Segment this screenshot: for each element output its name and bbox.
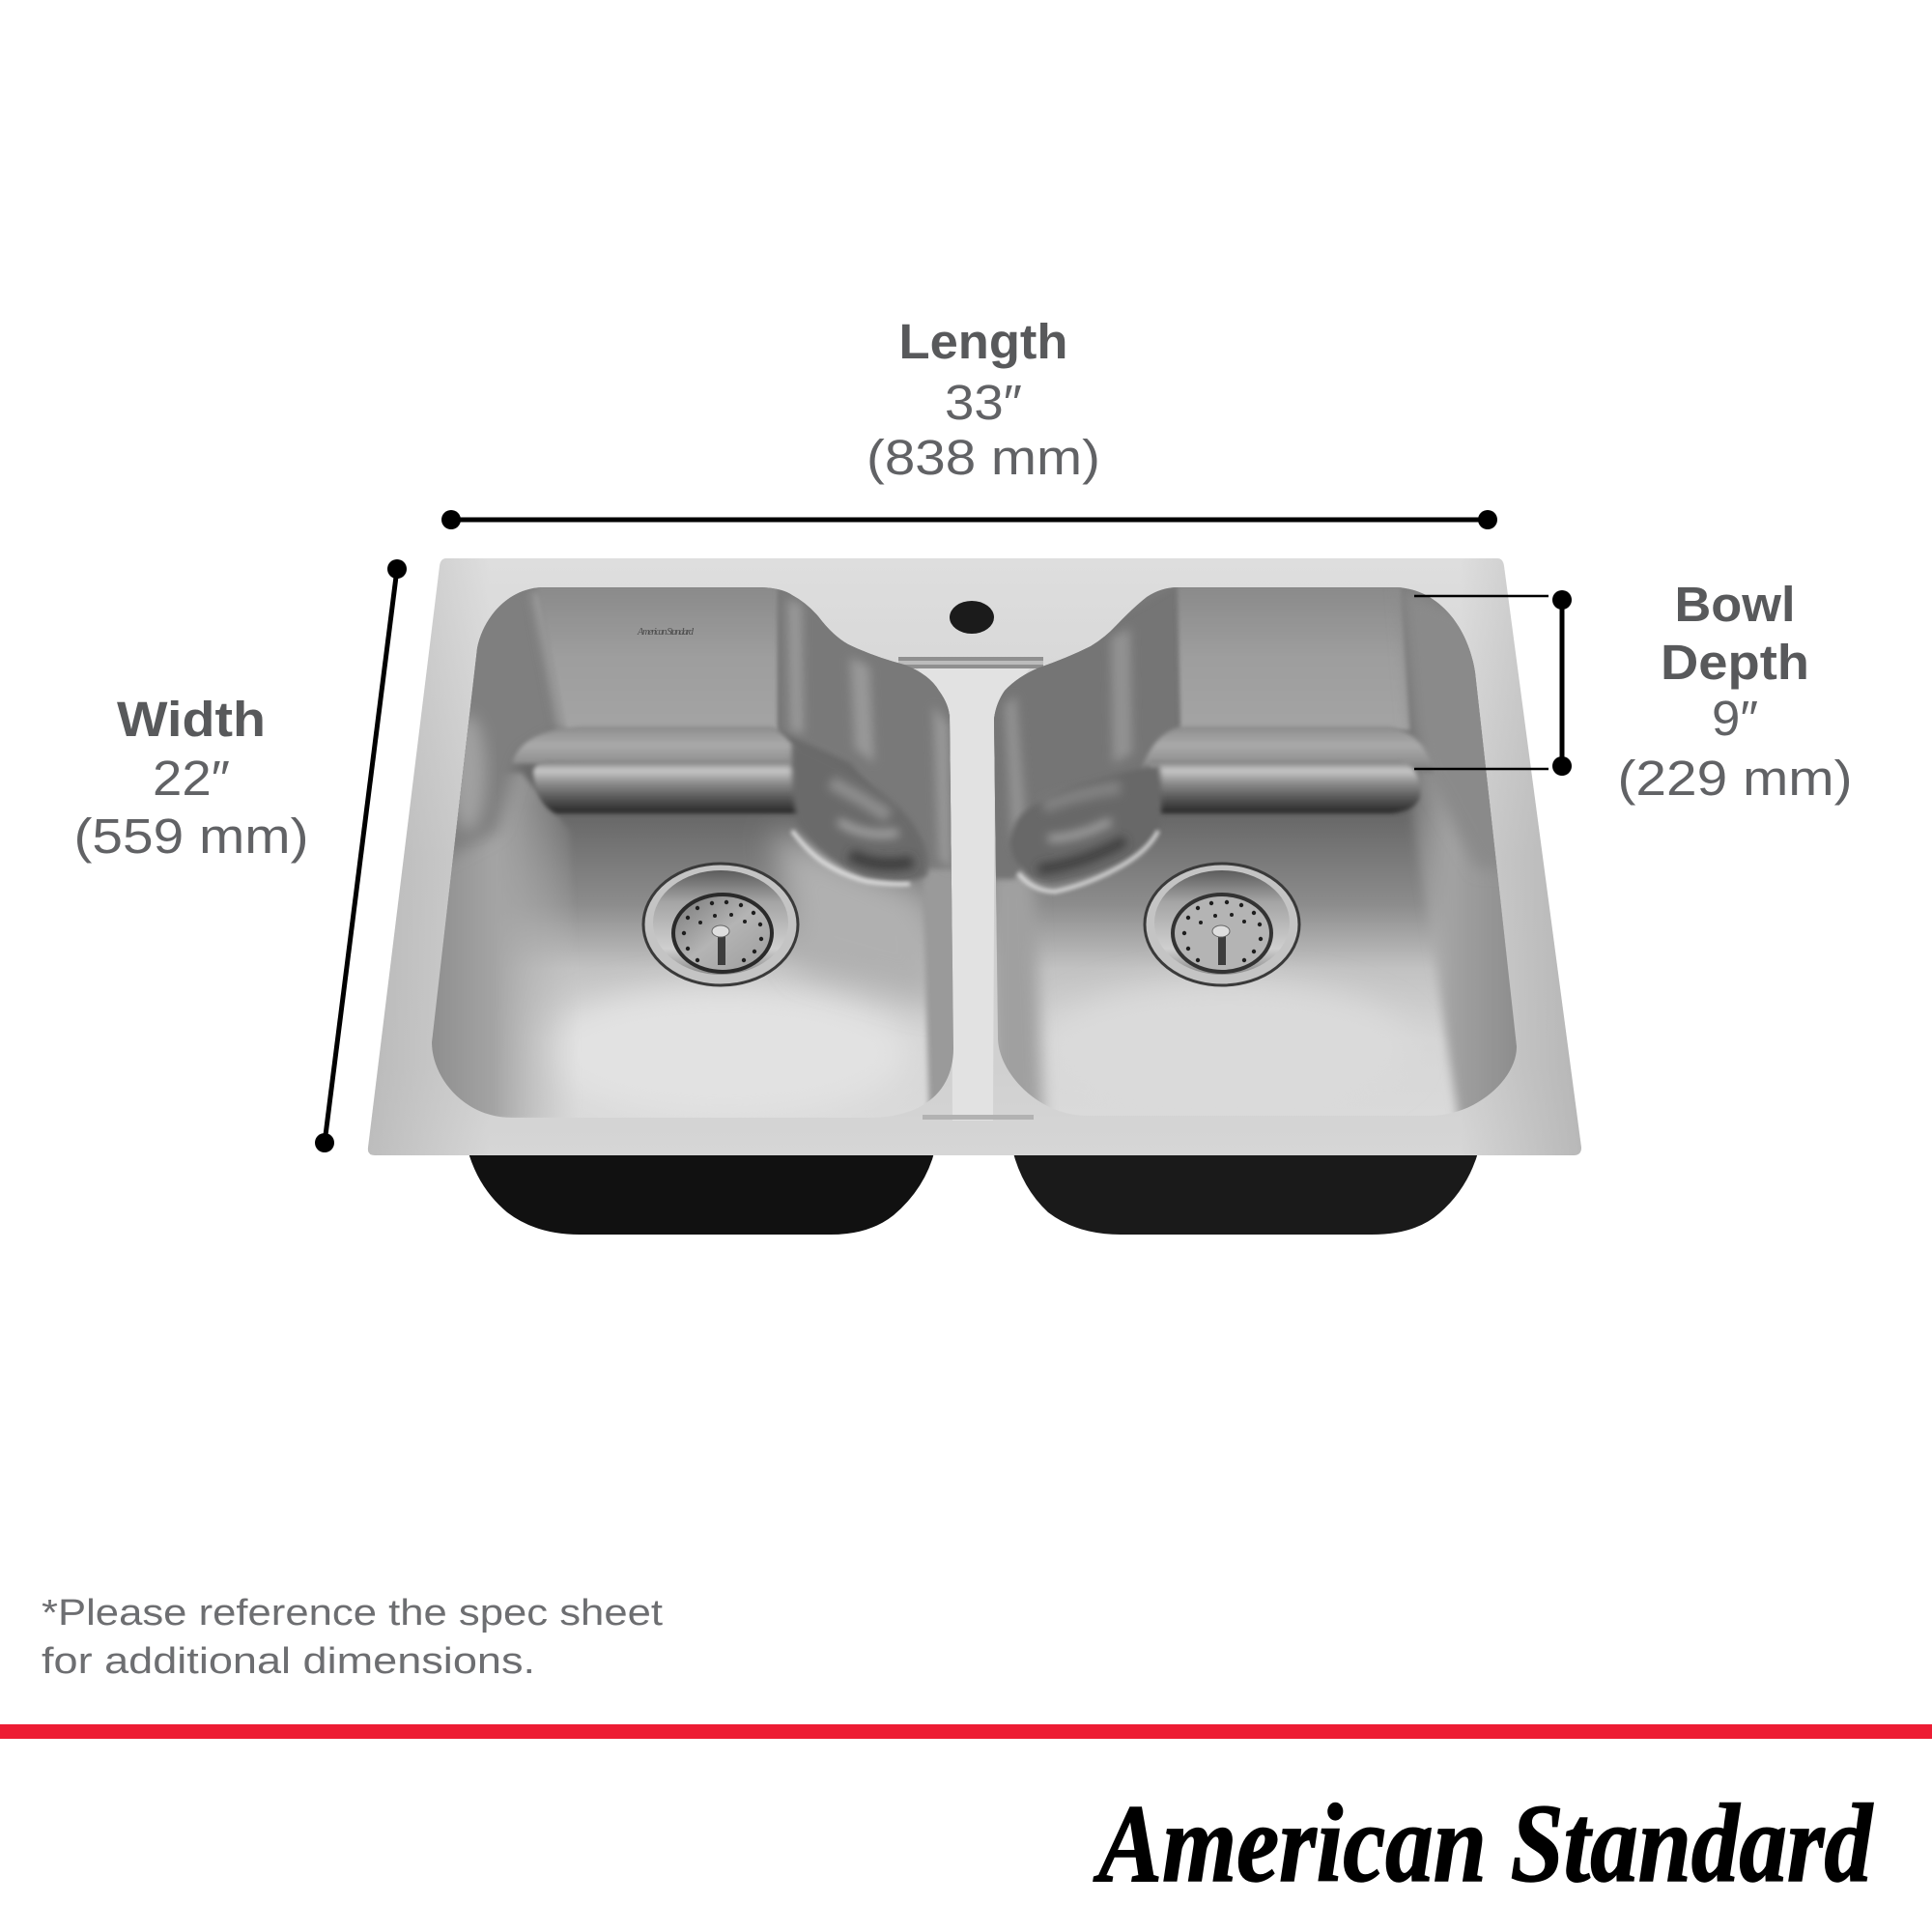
stainless deck plate — [368, 558, 1581, 1155]
left bowl right wall — [923, 867, 953, 1103]
right bowl back wall — [1178, 585, 1410, 730]
right bowl shelf lower band — [1150, 761, 1420, 813]
left bowl left wall — [432, 771, 568, 1118]
length label: (838 mm) — [867, 430, 1100, 485]
deck side shading — [368, 558, 1581, 1155]
bowl depth label: Depth — [1661, 635, 1809, 690]
length label — [867, 314, 1100, 485]
right drain strainer — [1145, 864, 1299, 985]
left bowl shelf upper band — [512, 726, 795, 765]
right bowl lobe bright edge — [1018, 831, 1158, 892]
footnote — [42, 1593, 664, 1682]
width dimension line — [315, 559, 407, 1152]
left bowl back wall — [537, 585, 779, 730]
faucet hole — [950, 601, 994, 634]
left bowl maker mark: American Standard — [637, 627, 695, 638]
width label: Width — [117, 692, 266, 747]
bowl depth label: 9″ — [1712, 691, 1758, 746]
bowl depth label: (229 mm) — [1617, 751, 1853, 806]
length label: 33″ — [945, 375, 1022, 430]
right bowl shelf upper band — [1140, 726, 1434, 773]
left bowl floor — [444, 587, 952, 987]
left bowl — [425, 580, 966, 1121]
right bowl right wall — [1410, 773, 1517, 1113]
width label: 22″ — [153, 751, 230, 806]
right bowl lobe highlights — [1038, 787, 1125, 869]
left bowl upper-left wall highlight — [531, 591, 570, 730]
left bowl wall highlights — [787, 599, 952, 869]
right bowl left wall — [990, 869, 1043, 1121]
footnote: *Please reference the spec sheet — [42, 1593, 664, 1634]
red divider band — [0, 1724, 1932, 1739]
right bowl — [985, 580, 1526, 1121]
right bowl wall highlights — [1005, 628, 1132, 850]
left bowl floor highlight — [562, 978, 895, 1101]
left bowl side wall glow — [451, 715, 486, 831]
right bowl floor highlight — [1086, 978, 1370, 1024]
width label: (559 mm) — [73, 809, 309, 864]
bowl depth dimension bracket — [1414, 590, 1572, 776]
sink product photo illustration — [368, 558, 1581, 1235]
bowl depth label: Bowl — [1675, 577, 1795, 632]
left bowl lighter floor right of the drain — [773, 831, 942, 1005]
left bowl corner lobe — [792, 744, 928, 882]
length label: Length — [898, 314, 1068, 369]
right bowl corner lobe — [1009, 765, 1161, 883]
right bowl floor — [994, 587, 1503, 987]
left bowl lobe highlights — [831, 782, 913, 865]
left bowl lobe bright edge — [792, 831, 910, 884]
width label — [73, 692, 309, 864]
footnote: for additional dimensions. — [42, 1641, 535, 1682]
bowl depth label — [1617, 577, 1853, 806]
left bowl shelf lower band — [533, 761, 807, 813]
left bowl upper-left wall — [454, 588, 556, 857]
left drain strainer — [643, 864, 798, 985]
right bowl upper-left wall — [985, 585, 1180, 879]
right under-bowl exterior — [1012, 1150, 1479, 1235]
left under-bowl exterior — [468, 1150, 935, 1235]
divider ledge between bowls — [898, 657, 1043, 1121]
left bowl upper-right wall — [779, 585, 966, 860]
right bowl upper-right wall — [1404, 591, 1495, 866]
length dimension line — [441, 510, 1497, 529]
